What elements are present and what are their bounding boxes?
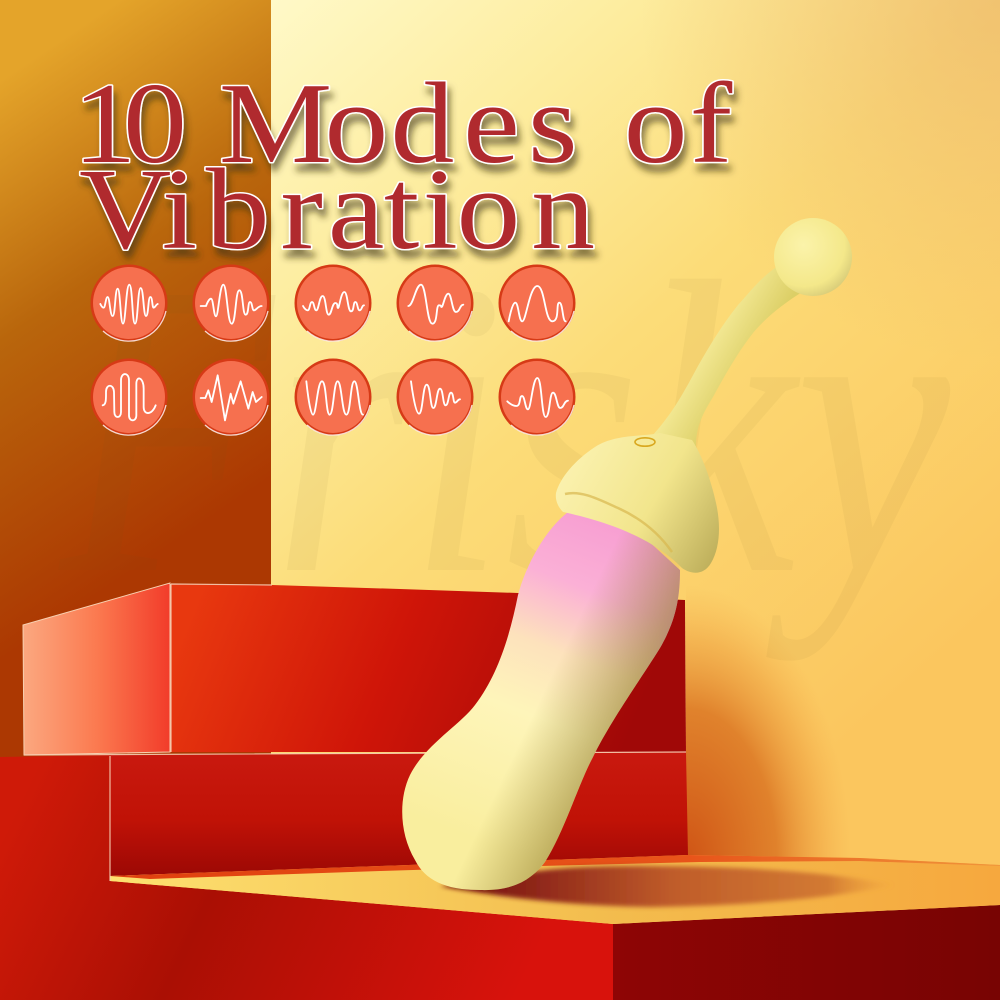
floor back glow strip bbox=[110, 855, 1000, 879]
icon: mode 9 bbox=[396, 358, 474, 436]
icon: mode 3 bbox=[294, 264, 372, 342]
base block left face bbox=[0, 755, 613, 1000]
product cap bbox=[556, 433, 719, 573]
product stem bbox=[652, 266, 802, 446]
step highlight lines bbox=[24, 584, 686, 881]
floor surface bbox=[110, 855, 1000, 924]
icon: mode 2 bbox=[192, 264, 270, 342]
icon: mode 10 bbox=[498, 358, 576, 436]
title line 2: Vibration bbox=[79, 145, 595, 274]
icon: mode 8 bbox=[294, 358, 372, 436]
upper step side face bbox=[23, 583, 170, 755]
product ball tip bbox=[774, 218, 852, 296]
title line 1: 10 Modes of bbox=[73, 59, 733, 188]
product body bbox=[402, 512, 680, 890]
title bbox=[73, 59, 733, 274]
background: left wall bbox=[0, 0, 271, 770]
wall shadow behind product bbox=[686, 585, 851, 860]
floor shadow bbox=[440, 866, 895, 907]
icon: mode 5 bbox=[498, 264, 576, 342]
staircase bbox=[0, 583, 1000, 1000]
background: right wall bbox=[270, 0, 1000, 880]
vibration mode icons bbox=[90, 264, 576, 436]
icon: mode 1 bbox=[90, 264, 168, 342]
icon: mode 4 bbox=[396, 264, 474, 342]
icon: mode 6 bbox=[90, 358, 168, 436]
base block right face bbox=[613, 905, 1000, 1000]
icon: mode 7 bbox=[192, 358, 270, 436]
upper step front face bbox=[171, 584, 686, 752]
power button bbox=[635, 438, 655, 446]
product bbox=[402, 218, 852, 890]
lower step front face bbox=[110, 752, 688, 876]
cap groove bbox=[565, 493, 672, 552]
